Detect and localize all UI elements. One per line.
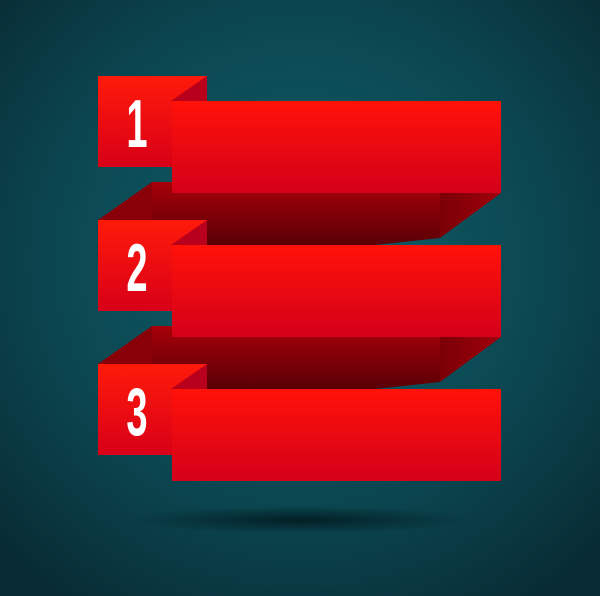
banner 3: [172, 389, 501, 481]
shadow under ribbons: [130, 506, 470, 534]
number tab 3: 3: [126, 373, 148, 450]
back band: between 1 and 2: [98, 182, 501, 245]
number tab 1: 1: [126, 85, 148, 162]
back band: between 2 and 3: [98, 326, 501, 389]
item 3: [98, 364, 501, 481]
number tab 3: [98, 364, 207, 455]
item 2: [98, 220, 501, 337]
number tab 1: [98, 76, 207, 167]
item 1: [98, 76, 501, 193]
banner 2: [172, 245, 501, 337]
number tab 2: 2: [126, 229, 148, 306]
banner 1: [172, 101, 501, 193]
number tab 2: [98, 220, 207, 311]
